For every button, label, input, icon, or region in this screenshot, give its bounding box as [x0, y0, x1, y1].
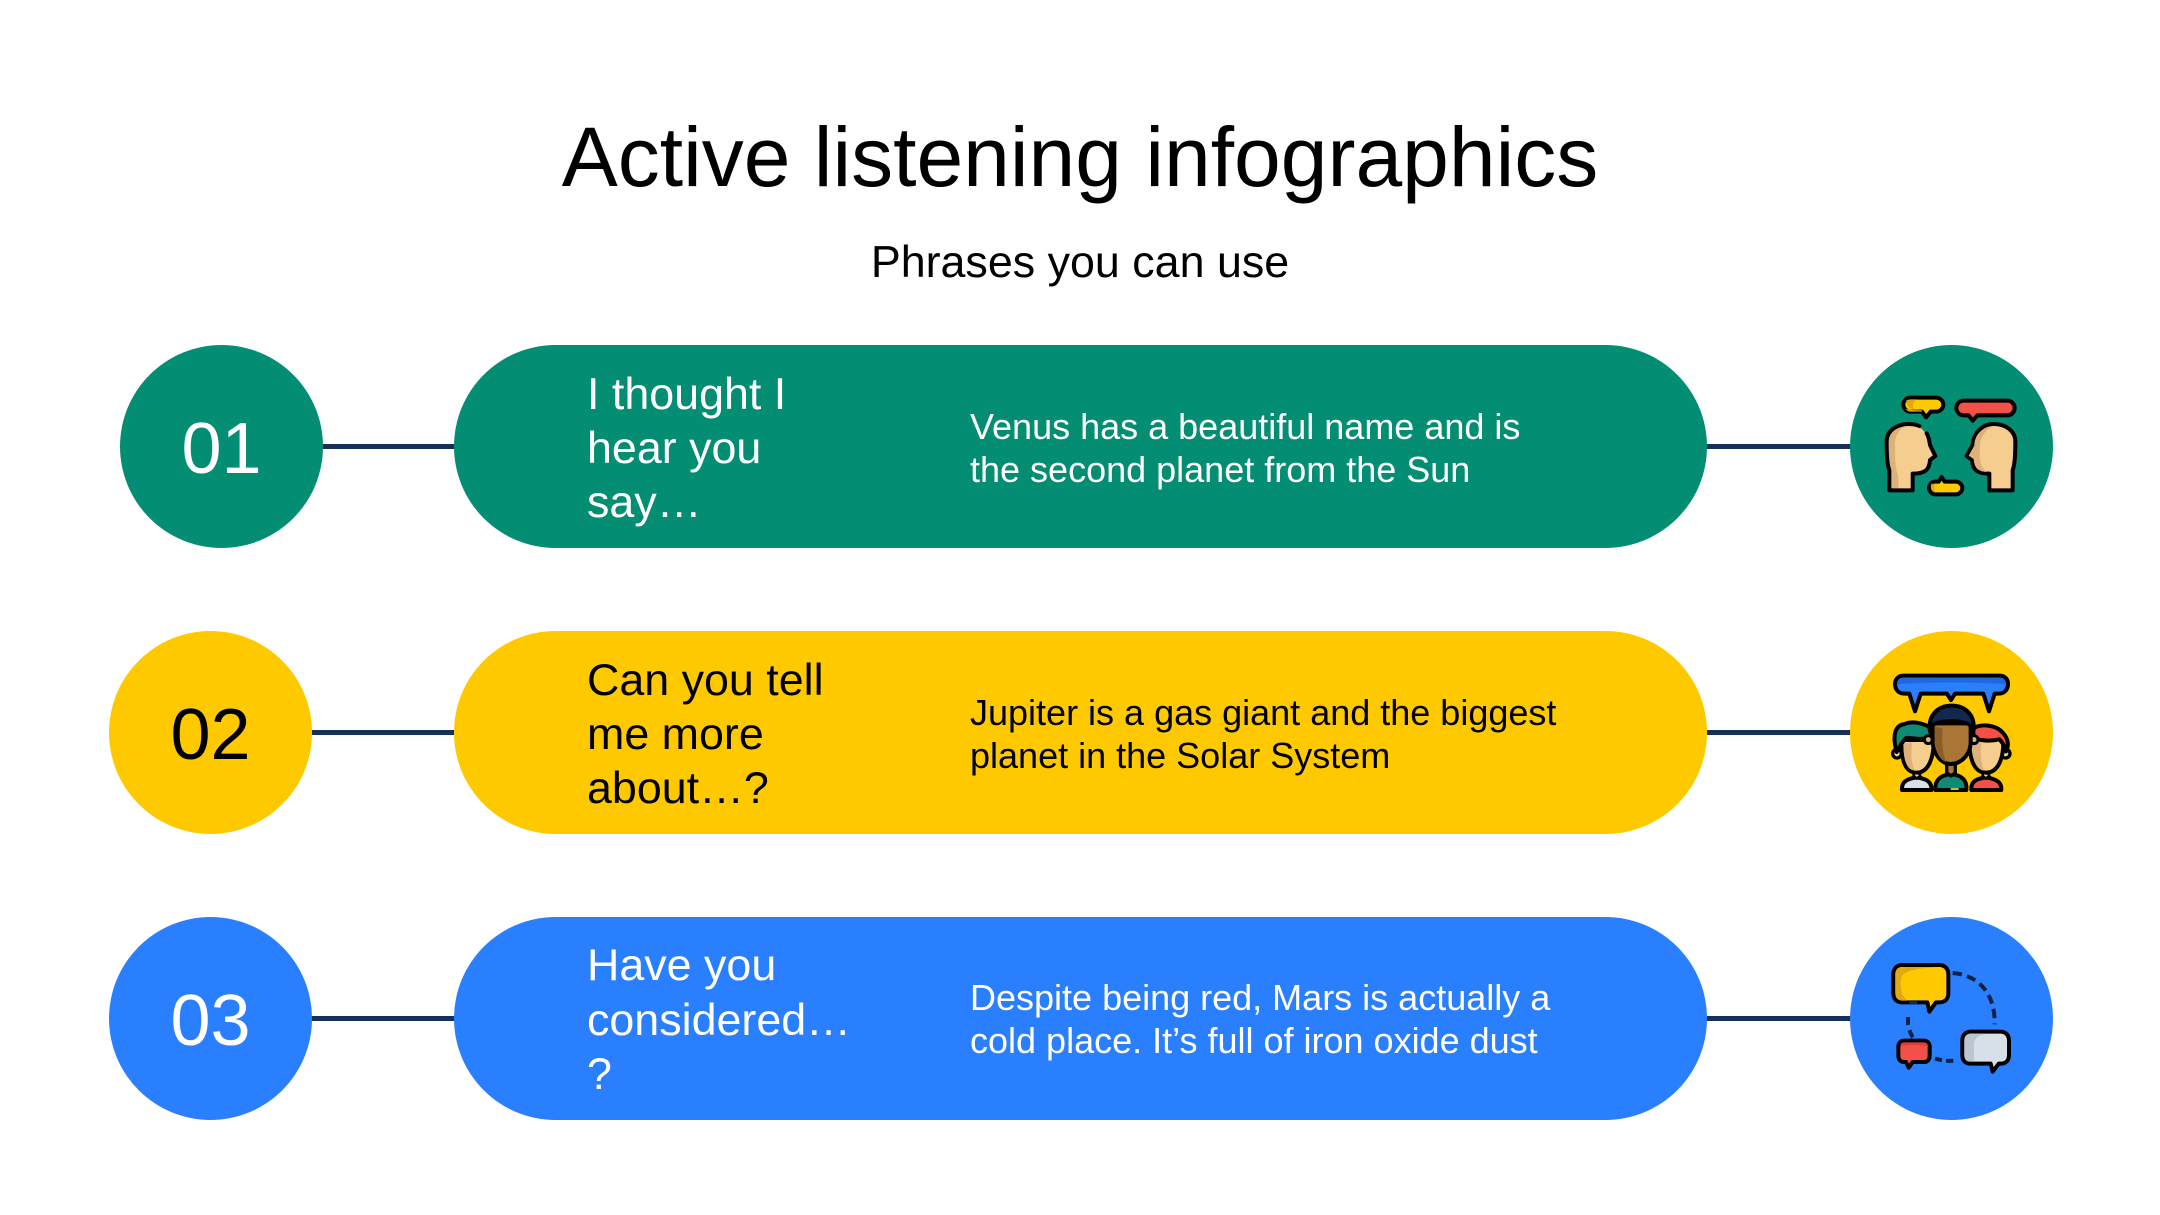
icon circle row 1 [1850, 345, 2053, 548]
phrase row 1 [587, 369, 786, 527]
description row 3: cold place. It’s full of iron oxide dust [970, 1020, 1538, 1061]
connector lines row 1 [323, 444, 1853, 448]
icon: group of people with speech bubble [1891, 674, 2012, 792]
phrase row 3: ? [587, 1049, 612, 1099]
pill row 3 [454, 917, 1707, 1120]
pill row 2 [454, 631, 1707, 834]
description row 1: Venus has a beautiful name and is [970, 406, 1520, 446]
number circle 02: 02 [170, 695, 251, 775]
number circle 01 [120, 345, 323, 548]
phrase row 3 [587, 940, 851, 1099]
phrase row 3: considered… [587, 995, 851, 1045]
description row 2: Jupiter is a gas giant and the biggest [970, 692, 1556, 732]
title: Active listening infographics [562, 110, 1598, 204]
phrase row 2: Can you tell [587, 655, 824, 705]
icon: two heads talking [1884, 396, 2018, 496]
description row 1 [970, 406, 1520, 490]
description row 1: the second planet from the Sun [970, 448, 1470, 490]
connector lines row 3 [311, 1016, 1853, 1020]
number circle 02 [109, 631, 312, 834]
description row 2 [970, 692, 1556, 776]
phrase row 2: about…? [587, 763, 769, 813]
number circle 03 [109, 917, 312, 1120]
phrase row 1: I thought I [587, 369, 786, 419]
icon circle row 3 [1850, 917, 2053, 1120]
phrase row 2 [587, 655, 824, 813]
description row 2: planet in the Solar System [970, 734, 1390, 776]
phrase row 2: me more [587, 709, 764, 759]
connector lines row 2 [311, 730, 1853, 734]
phrase row 1: hear you [587, 423, 761, 473]
phrase row 3: Have you [587, 940, 776, 990]
subtitle: Phrases you can use [871, 237, 1289, 287]
icon: connected speech bubbles [1891, 963, 2011, 1074]
number circle 03: 03 [170, 981, 251, 1061]
description row 3: Despite being red, Mars is actually a [970, 977, 1550, 1018]
pill row 1 [454, 345, 1707, 548]
icon circle row 2 [1850, 631, 2053, 834]
phrase row 1: say… [587, 477, 702, 527]
number circle 01: 01 [181, 409, 262, 489]
description row 3 [970, 977, 1550, 1061]
